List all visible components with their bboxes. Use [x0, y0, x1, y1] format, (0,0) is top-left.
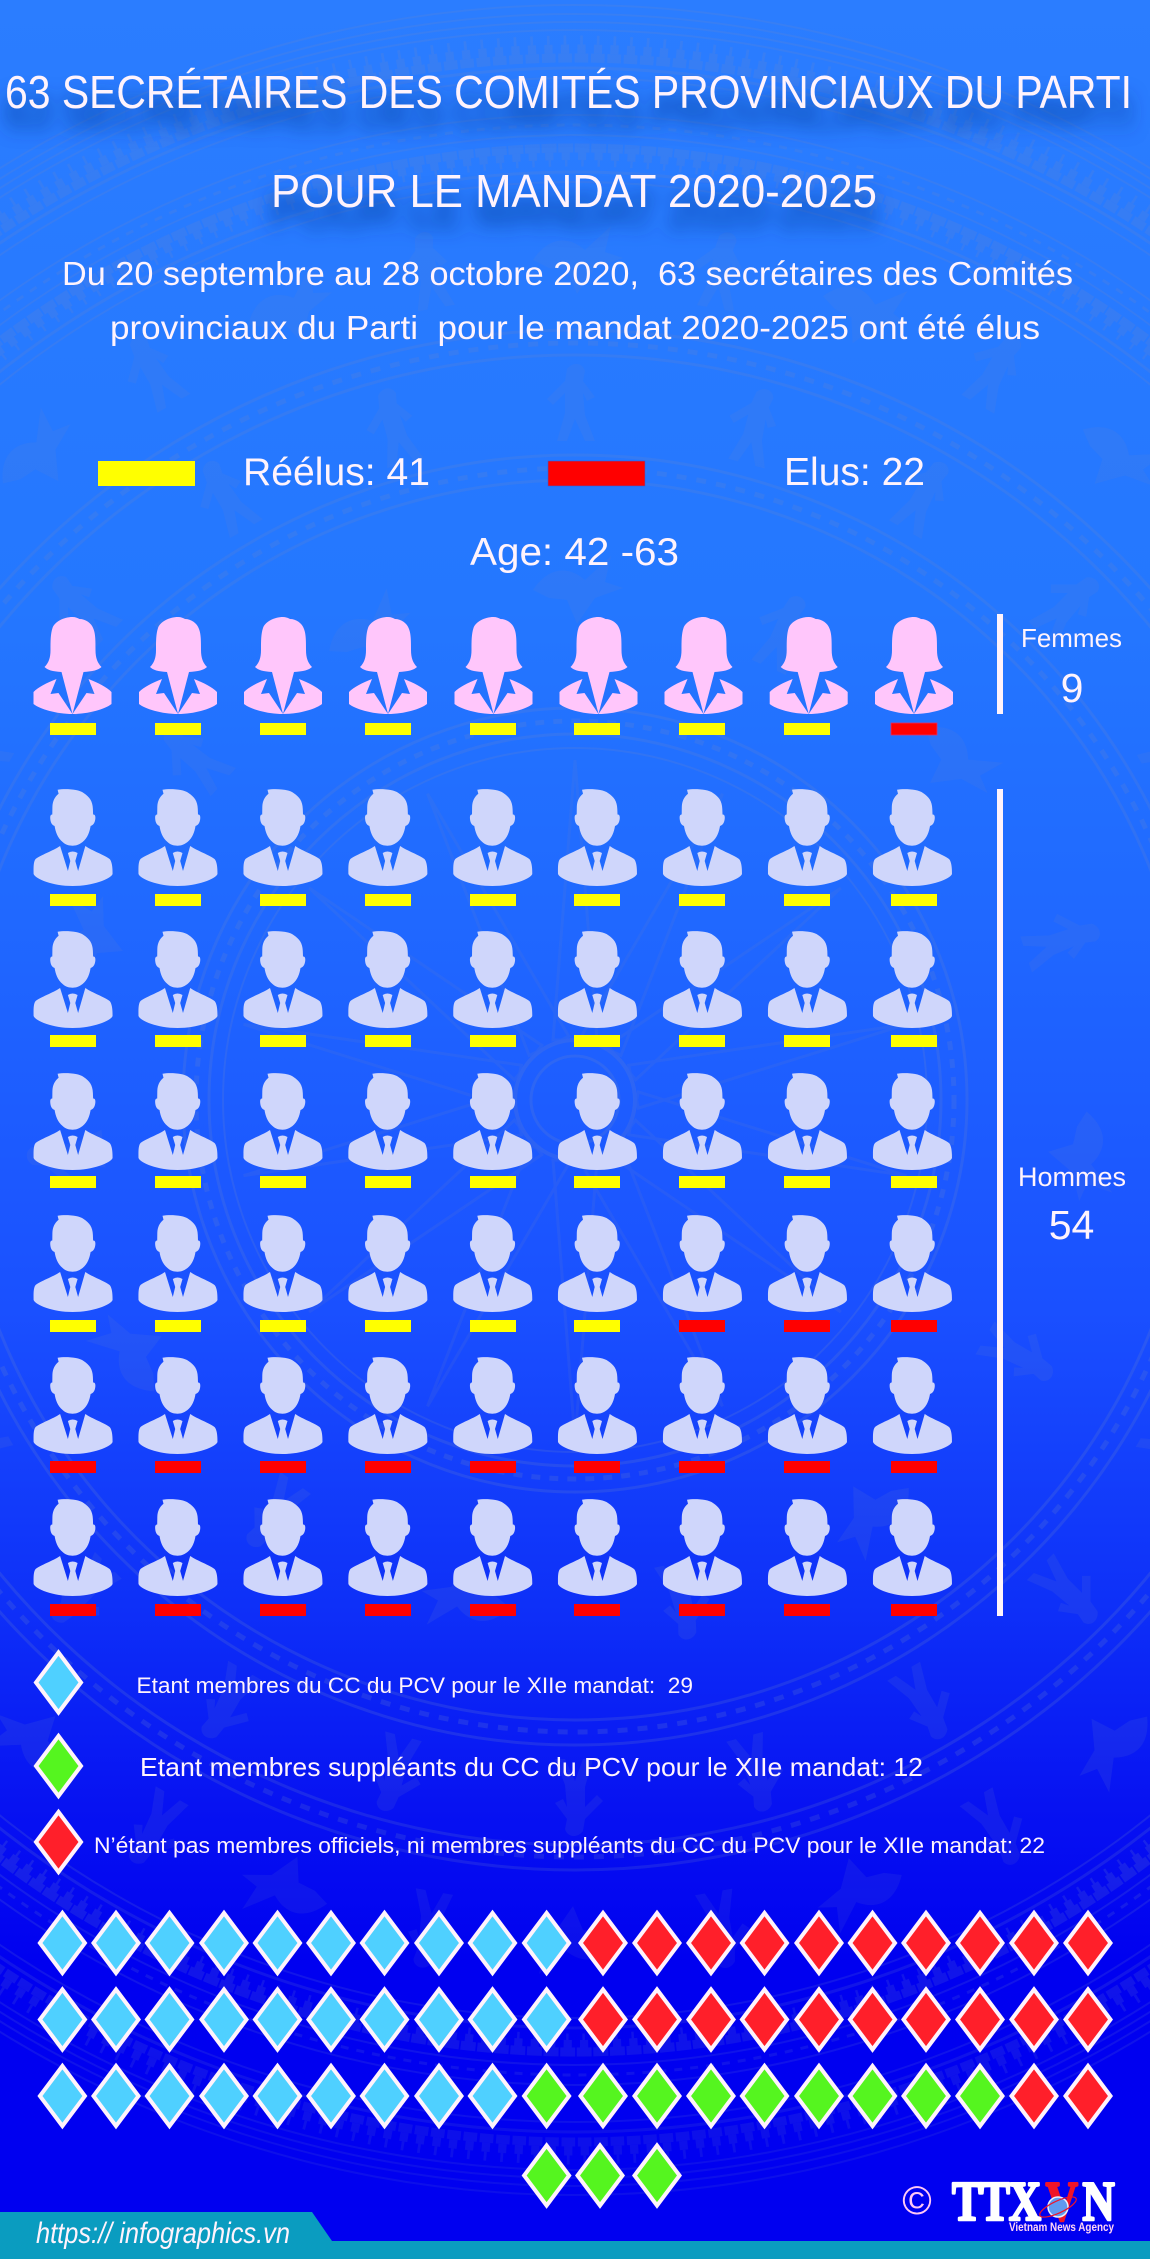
pictogram row: men 6, all élus [34, 1499, 952, 1616]
icon: man 3 [243, 1215, 322, 1332]
icon: man 7 [663, 1499, 742, 1616]
pictogram row: men 1, all réélus [34, 789, 952, 906]
pictogram row: men 5, all élus [34, 1357, 952, 1473]
website url: https:// infographics.vn [36, 2217, 290, 2250]
red legend swatch [548, 461, 645, 486]
icon: green diamond [36, 1736, 81, 1796]
icon: man 1 [34, 789, 113, 906]
icon: man 4 [348, 1357, 427, 1473]
icon: man 1 [34, 931, 113, 1047]
label: élus: Elus: 22 [784, 451, 925, 494]
icon: man 2 [138, 1499, 218, 1616]
icon: man 6 [558, 931, 637, 1047]
icon: red diamond [36, 1812, 81, 1872]
icon: man 2 [138, 931, 218, 1047]
icon: man 6 [558, 1215, 637, 1332]
icon: man 4 [348, 789, 427, 906]
icon: man 9 [873, 1215, 952, 1332]
legend text: non-members: N’étant pas membres officiels, ni membres suppléants du CC du PCV pour le XIIe mandat: 22 [94, 1833, 1045, 1858]
title [5, 66, 1132, 217]
label: hommes 54: Hommes [1018, 1162, 1126, 1192]
age range: Age: 42 -63 [470, 531, 679, 574]
icon: man 5 [453, 1215, 532, 1332]
icon: man 8 [768, 1073, 847, 1188]
pictogram row: men 3, all réélus [34, 1073, 952, 1188]
bracket line: women [997, 614, 1003, 714]
diamond grid row 3: 9 cyan, 9 green, 2 red [40, 2066, 1110, 2126]
label: femmes 9: 9 [1061, 665, 1083, 711]
icon: man 3 [243, 789, 322, 906]
icon: woman 1 [34, 617, 112, 735]
icon: man 7 [663, 1073, 742, 1188]
icon: man 6 [558, 789, 637, 906]
icon: man 9 [873, 1357, 952, 1473]
legend text: alternates: Etant membres suppléants du CC du PCV pour le XIIe mandat: 12 [140, 1752, 923, 1782]
legend text: members: Etant membres du CC du PCV pour le XIIe mandat: 29 [136, 1673, 693, 1698]
icon: man 9 [873, 931, 952, 1047]
icon: man 4 [348, 1215, 427, 1332]
icon: man 2 [138, 1073, 218, 1188]
logo tagline: Vietnam News Agency [1009, 2220, 1114, 2234]
icon: globe [1037, 2193, 1079, 2221]
icon: man 6 [558, 1357, 637, 1473]
icon: man 2 [138, 1215, 218, 1332]
icon: man 2 [138, 1357, 218, 1473]
icon: woman 3 [244, 617, 322, 735]
legend item: not members, 22 [36, 1812, 1045, 1872]
icon: man 3 [243, 1357, 322, 1473]
pictogram row: women, 8 réélues and 1 élue [34, 617, 953, 735]
icon: woman 8 [770, 617, 848, 735]
icon: man 9 [873, 1499, 952, 1616]
icon: woman 4 [349, 617, 427, 735]
icon: man 8 [768, 931, 847, 1047]
icon: man 5 [453, 1499, 532, 1616]
icon: man 8 [768, 1499, 847, 1616]
label: hommes 54: 54 [1049, 1202, 1094, 1248]
bracket line: men [997, 789, 1003, 1616]
icon: woman 7 [664, 617, 742, 735]
icon: man 3 [243, 1499, 322, 1616]
icon: man 6 [558, 1499, 637, 1616]
icon: man 9 [873, 1073, 952, 1188]
icon: man 5 [453, 789, 532, 906]
icon: man 4 [348, 1073, 427, 1188]
icon: man 1 [34, 1073, 113, 1188]
legend item: members, 29 [36, 1652, 693, 1712]
icon: man 7 [663, 1215, 742, 1332]
pictogram row: men 2, all réélus [34, 931, 952, 1047]
icon: man 1 [34, 1357, 113, 1473]
diamond grid row 2: 10 cyan, 10 red [40, 1990, 1110, 2050]
icon: cyan diamond [36, 1652, 81, 1712]
icon: man 8 [768, 1215, 847, 1332]
label: réélus: Réélus: 41 [243, 451, 430, 494]
legend item: alternate members, 12 [36, 1736, 923, 1796]
icon: man 7 [663, 931, 742, 1047]
icon: man 1 [34, 1499, 113, 1616]
icon: woman 5 [454, 617, 532, 735]
icon: man 9 [873, 789, 952, 906]
icon: man 7 [663, 1357, 742, 1473]
icon: man 4 [348, 1499, 427, 1616]
yellow legend swatch [98, 461, 195, 486]
icon: man 8 [768, 1357, 847, 1473]
legend: réélus and élus [98, 451, 925, 494]
icon: man 7 [663, 789, 742, 906]
diamond grid row 4: 3 green [524, 2146, 680, 2206]
icon: woman 2 [139, 617, 217, 735]
icon: man 3 [243, 931, 322, 1047]
icon: man 5 [453, 1073, 532, 1188]
pictogram row: men 4, 6 réélus and 3 élus [34, 1215, 952, 1332]
icon: man 4 [348, 931, 427, 1047]
label: femmes 9 [1021, 623, 1122, 711]
icon: man 6 [558, 1073, 637, 1188]
intro text [62, 255, 1073, 346]
label: femmes 9: Femmes [1021, 623, 1122, 653]
intro text: Du 20 septembre au 28 octobre 2020, 63 secrétaires des Comités [62, 255, 1073, 292]
icon: man 5 [453, 1357, 532, 1473]
icon: woman 9 [875, 617, 953, 735]
diamond grid row 1: 10 cyan, 10 red [40, 1913, 1110, 1973]
label: hommes 54 [1018, 1162, 1126, 1248]
icon: man 5 [453, 931, 532, 1047]
footer band with website tab [0, 2212, 1150, 2259]
icon: man 2 [138, 789, 218, 906]
icon: man 3 [243, 1073, 322, 1188]
icon: man 8 [768, 789, 847, 906]
icon: woman 6 [560, 617, 638, 735]
intro text: provinciaux du Parti pour le mandat 2020-2025 ont été élus [110, 309, 1040, 346]
icon: man 1 [34, 1215, 113, 1332]
title: POUR LE MANDAT 2020-2025 [271, 165, 877, 217]
copyright symbol: © [902, 2179, 932, 2223]
logo: TTXVN: TTXVN [952, 2170, 1115, 2232]
